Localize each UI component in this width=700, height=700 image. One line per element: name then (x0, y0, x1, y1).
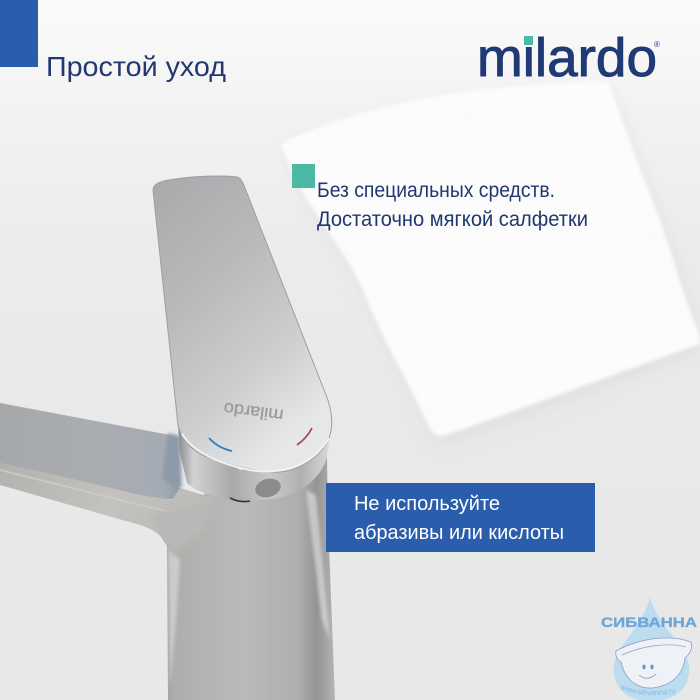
watermark: Sibvanna (601, 598, 697, 700)
photo: white towel (281, 81, 700, 443)
watermark bathtub (616, 638, 692, 688)
body right reflection (306, 490, 330, 640)
teal marker square (292, 164, 315, 188)
text: no special products: Достаточно мягкой салфетки (317, 208, 588, 231)
hot mark (297, 428, 312, 445)
callout: no abrasives (326, 483, 595, 552)
faucet spout arm (0, 403, 215, 555)
faucet dark gap (230, 498, 250, 502)
lever edge highlight (182, 434, 329, 471)
watermark drop (614, 597, 689, 700)
logo: milardo: milardo (477, 28, 657, 88)
watermark url: www.sibvanna.ru (621, 685, 676, 696)
faucet body (150, 458, 335, 700)
watermark tub face (639, 665, 656, 678)
title: Простой уход (46, 51, 226, 82)
text: no special products: Без специальных средств. (317, 179, 555, 202)
faucet lever rim (178, 420, 332, 500)
photo: chrome faucet (0, 176, 335, 700)
lever engraved logo: milardo (223, 399, 284, 425)
logo teal dot (524, 36, 533, 45)
body left reflection (168, 548, 180, 690)
cold mark (209, 438, 232, 451)
logo registered mark: ® (654, 40, 660, 49)
spout to body blend (164, 510, 190, 550)
watermark tub inner rim (622, 645, 686, 655)
watermark name: СИБВАННА (601, 614, 697, 630)
faucet lever top (153, 176, 332, 472)
blue corner square (0, 0, 38, 67)
faucet button (253, 476, 283, 500)
callout: no abrasives: Не используйте (354, 493, 500, 515)
callout: no abrasives: абразивы или кислоты (354, 522, 564, 544)
